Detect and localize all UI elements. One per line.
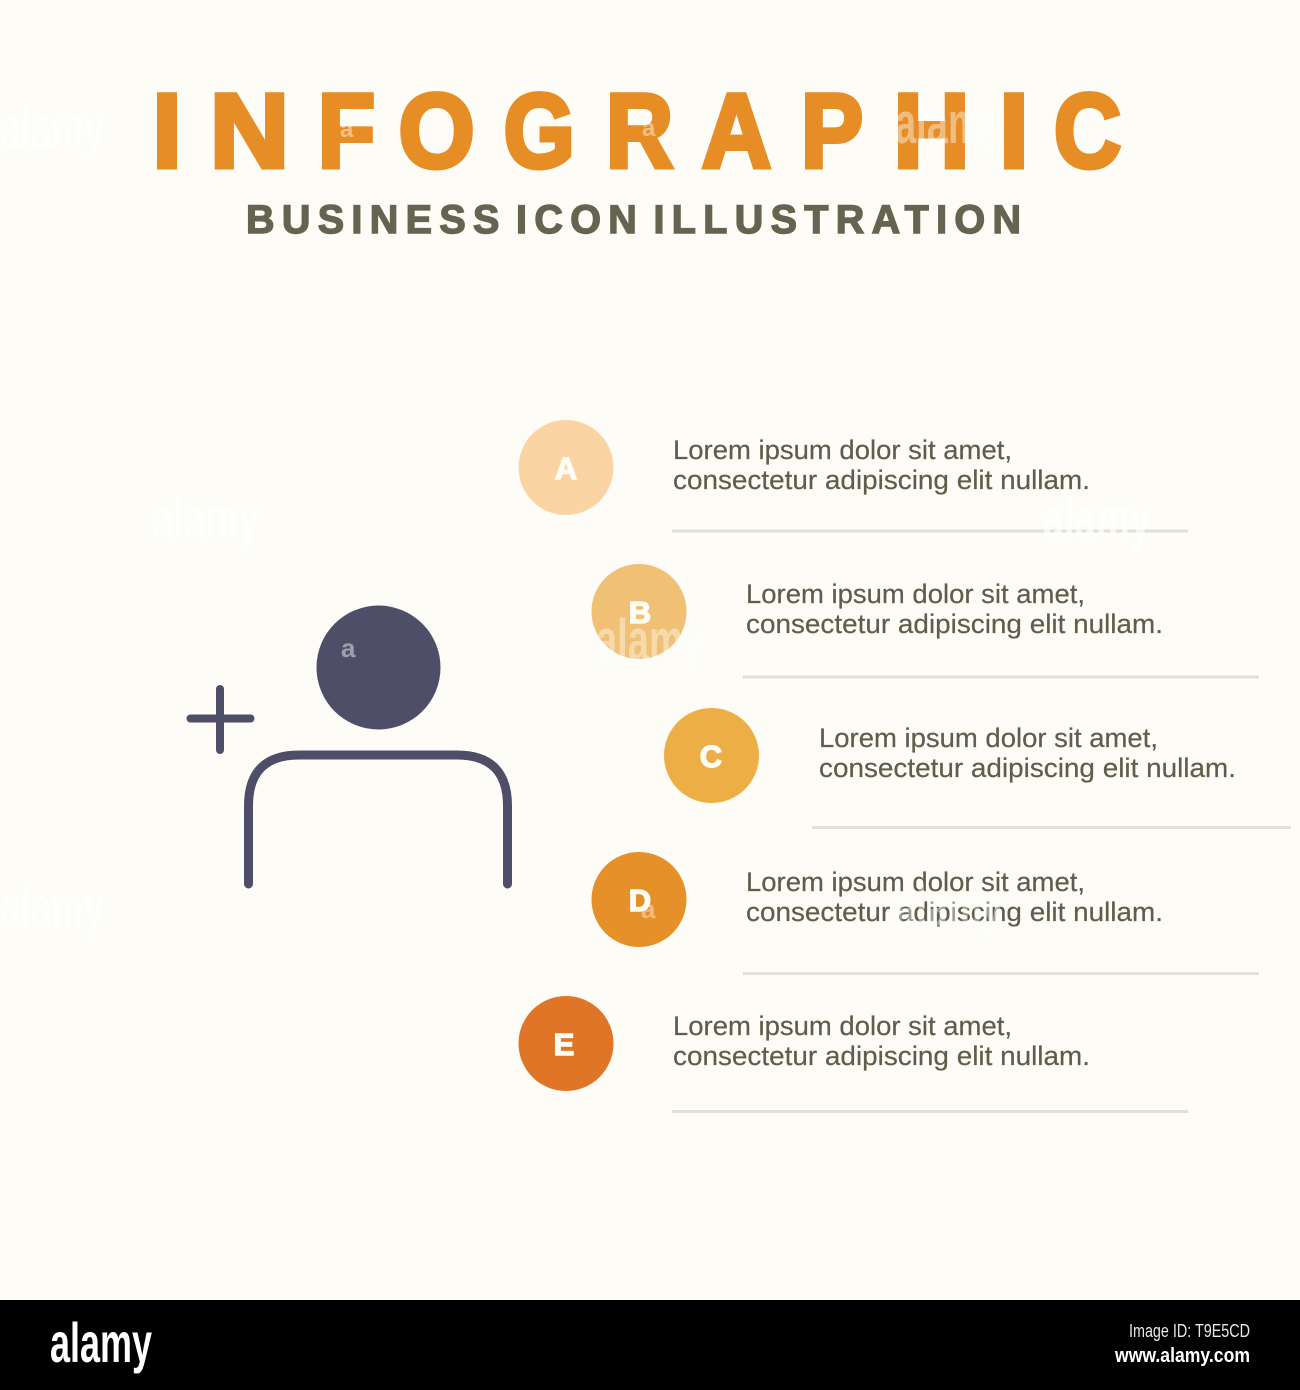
title: R — [606, 73, 673, 190]
title: A — [702, 73, 771, 190]
divider C — [812, 826, 1291, 829]
footer logo: alamy — [50, 1311, 152, 1374]
watermarks: alamy — [1043, 486, 1151, 551]
letter C: C — [700, 739, 722, 774]
step B — [592, 564, 1259, 678]
badge D — [592, 852, 686, 947]
watermarks: a — [642, 115, 656, 142]
image id: Image ID: T9E5CD — [1129, 1321, 1250, 1341]
divider B — [743, 676, 1259, 678]
title: I — [1000, 73, 1028, 190]
watermarks: alamy — [0, 875, 104, 940]
letter A: A — [555, 451, 577, 486]
badge B — [592, 564, 686, 659]
watermarks — [0, 91, 1151, 940]
text E: consectetur adipiscing elit nullam. — [673, 1041, 1090, 1071]
title: G — [504, 73, 575, 190]
text C: consectetur adipiscing elit nullam. — [819, 753, 1236, 783]
title — [152, 73, 1121, 190]
title: O — [399, 73, 475, 190]
letter D: D — [629, 883, 651, 918]
text A: consectetur adipiscing elit nullam. — [673, 465, 1090, 495]
text D: Lorem ipsum dolor sit amet, — [746, 867, 1085, 897]
subtitle: BUSINESS ICON ILLUSTRATION — [246, 198, 1021, 242]
step E — [518, 996, 1188, 1113]
watermarks: alamy — [152, 486, 260, 551]
text D: consectetur adipiscing elit nullam. — [746, 897, 1163, 927]
icon: plus sign — [190, 689, 250, 750]
icon: person with plus — [190, 606, 508, 884]
divider D — [743, 972, 1259, 975]
title: C — [1054, 73, 1121, 190]
title: N — [210, 73, 289, 190]
icon: head — [316, 606, 440, 730]
watermarks: alamy — [895, 875, 1003, 940]
divider E — [672, 1110, 1188, 1113]
letter E: E — [554, 1027, 574, 1062]
title: I — [152, 73, 182, 190]
watermarks: a — [340, 116, 354, 143]
text A: Lorem ipsum dolor sit amet, — [673, 435, 1012, 465]
website: www.alamy.com — [1114, 1345, 1250, 1367]
letter B: B — [629, 595, 651, 630]
title: H — [894, 73, 970, 190]
watermarks: a — [641, 894, 656, 924]
title: P — [801, 73, 863, 190]
badge C — [664, 708, 759, 803]
text B: Lorem ipsum dolor sit amet, — [746, 579, 1085, 609]
footer bar — [0, 1300, 1300, 1390]
text B: consectetur adipiscing elit nullam. — [746, 609, 1163, 639]
badge E — [518, 996, 614, 1091]
watermarks: alamy — [895, 91, 1003, 156]
text E: Lorem ipsum dolor sit amet, — [673, 1011, 1012, 1041]
text C: Lorem ipsum dolor sit amet, — [819, 723, 1158, 753]
step C — [664, 708, 1291, 829]
title: F — [318, 73, 375, 190]
watermarks: alamy — [0, 96, 104, 161]
watermarks: a — [341, 633, 356, 663]
badge A — [518, 420, 614, 515]
watermarks: alamy — [596, 608, 704, 673]
icon: shoulders — [248, 755, 508, 884]
step D — [592, 852, 1259, 975]
step A — [518, 420, 1188, 532]
divider A — [672, 530, 1188, 532]
